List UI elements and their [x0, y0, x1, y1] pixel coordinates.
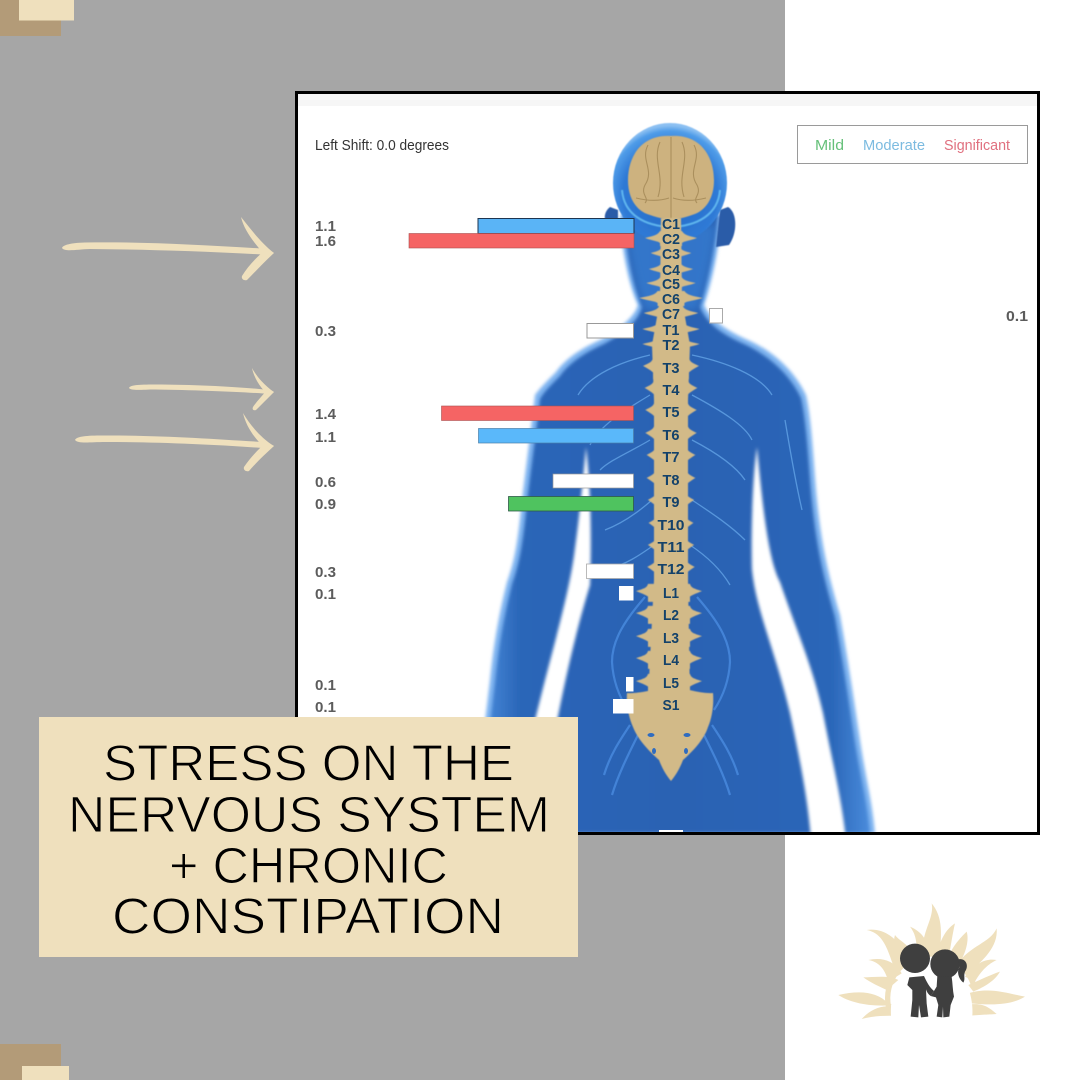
vertebra labels: L2 — [663, 607, 679, 624]
text: left shift: Left Shift: 0.0 degrees — [315, 138, 449, 154]
body silhouette — [476, 215, 875, 833]
spine column — [627, 218, 713, 781]
sun disc — [891, 957, 972, 1016]
vertebra labels: T8 — [662, 472, 680, 489]
vertebra labels: T9 — [662, 494, 680, 511]
arrow: pointing to T5 — [129, 368, 274, 410]
decoration: top left blocks — [0, 0, 74, 36]
vertebra labels: L3 — [663, 630, 679, 647]
frame border — [296, 92, 1038, 834]
panel: spinal scan chart — [295, 91, 1040, 900]
vertebra labels: C2 — [662, 231, 680, 248]
bar chart: shift bars — [409, 218, 722, 835]
value labels: 0.1 — [315, 587, 336, 603]
title text: STRESS ON THE — [103, 734, 514, 792]
arrow: pointing to C1 and C2 — [62, 217, 274, 280]
value labels: 0.1 — [315, 678, 336, 694]
title text: NERVOUS SYSTEM — [68, 786, 550, 843]
value labels: 0.3 — [315, 324, 336, 340]
nerves — [578, 355, 802, 585]
vertebra labels: C7 — [662, 306, 680, 323]
arm gap: left — [533, 448, 594, 717]
arm gap: right — [752, 447, 846, 840]
legend: Significant — [944, 138, 1010, 154]
neck highlight — [626, 225, 716, 310]
value labels: 0.6 — [315, 475, 336, 491]
brain rim — [622, 190, 720, 227]
vertebra labels: S1 — [662, 697, 680, 714]
vertebra labels: C6 — [662, 291, 680, 308]
girl — [930, 949, 967, 1017]
vertebra labels: C4 — [662, 262, 681, 279]
vertebra labels: C1 — [662, 216, 680, 233]
title text: + CHRONIC — [169, 837, 448, 894]
legend: Moderate — [863, 138, 925, 154]
vertebra labels: T11 — [658, 539, 684, 556]
value labels: 1.4 — [315, 407, 336, 423]
vertebra labels: T7 — [662, 449, 680, 466]
decoration: bottom left blocks — [0, 1044, 69, 1080]
legend: Mild — [815, 138, 844, 154]
vertebra labels: T10 — [658, 517, 684, 534]
vertebra labels: T3 — [662, 360, 680, 377]
vertebra labels: T2 — [662, 337, 680, 354]
value labels — [315, 219, 1028, 716]
title box — [39, 717, 578, 957]
value labels: 1.1 — [315, 430, 336, 446]
vertebra labels: T1 — [662, 322, 680, 339]
ears — [605, 207, 618, 222]
illustration: blue body with spine — [483, 122, 877, 832]
vertebra labels: T12 — [658, 561, 684, 578]
value labels: 0.1 — [1006, 309, 1028, 325]
title text: CONSTIPATION — [112, 888, 504, 944]
value labels: 0.1 — [315, 700, 336, 716]
value labels: 0.9 — [315, 497, 336, 513]
vertebra labels: L1 — [663, 585, 679, 602]
title text — [68, 734, 550, 944]
vertebra labels: T5 — [662, 404, 680, 421]
legend — [798, 126, 1028, 164]
sacrum holes — [648, 733, 690, 754]
vertebra labels: T6 — [662, 427, 680, 444]
brain — [628, 136, 714, 220]
vertebra labels: C5 — [662, 276, 680, 293]
value labels: 0.3 — [315, 565, 336, 581]
sun ring — [875, 942, 988, 1055]
vertebra labels — [658, 216, 684, 714]
value labels: 1.6 — [315, 234, 336, 250]
sun rays — [838, 903, 1025, 1019]
value labels: 1.1 — [315, 219, 336, 235]
background: grey panel — [0, 0, 785, 1080]
boy — [900, 944, 934, 1017]
arrow: pointing to T6 — [75, 413, 274, 471]
vertebra labels: T4 — [662, 382, 680, 399]
vertebra labels: C3 — [662, 246, 680, 263]
logo: sun and two children — [838, 903, 1025, 1055]
vertebra labels: L4 — [663, 652, 680, 669]
vertebra labels: L5 — [663, 675, 679, 692]
head — [613, 123, 727, 243]
